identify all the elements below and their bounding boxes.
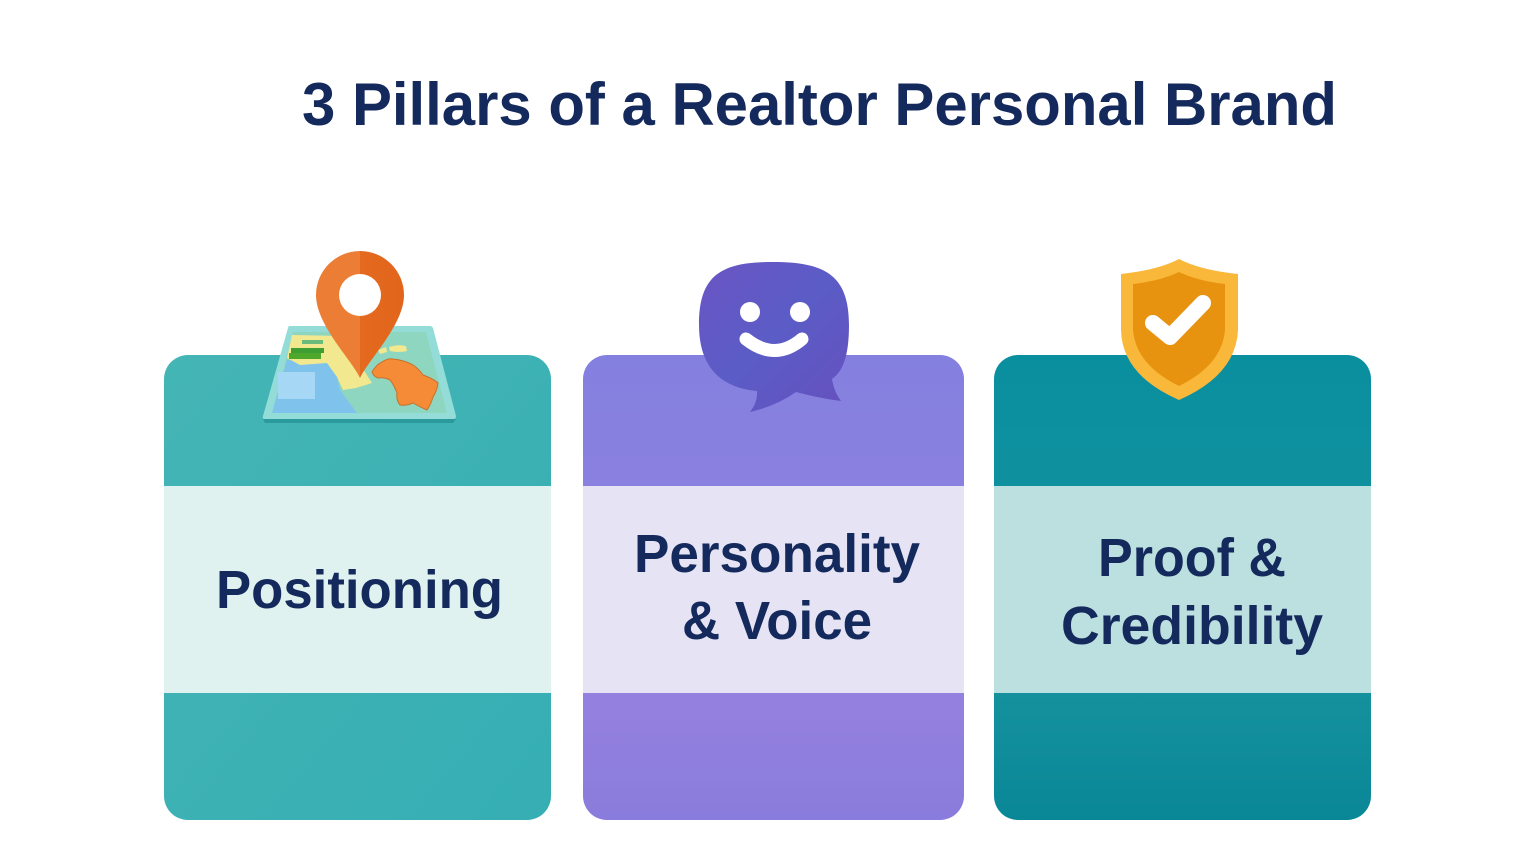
panel: proof and credibility [994, 355, 1371, 820]
label: personality and voice: Personality [634, 524, 920, 584]
label: proof and credibility [1061, 528, 1323, 656]
label band: positioning [164, 486, 551, 693]
location pin [316, 251, 404, 378]
icon: smiling speech bubble [699, 262, 849, 412]
panel: personality and voice [583, 355, 964, 820]
label: proof and credibility: Credibility [1061, 596, 1323, 656]
card background: positioning [164, 355, 551, 820]
label band: proof [994, 486, 1371, 693]
icon: map with location pin [263, 251, 456, 423]
card background: personality [583, 355, 964, 820]
panel: positioning [164, 355, 551, 820]
label: positioning: Positioning [216, 560, 503, 620]
label: proof and credibility: Proof & [1098, 528, 1286, 588]
map sheet [263, 326, 456, 423]
label: personality and voice [634, 524, 920, 651]
label: personality and voice: & Voice [682, 591, 872, 651]
label band: personality [583, 486, 964, 693]
icon: shield with check mark [1121, 259, 1238, 400]
card background: proof [994, 355, 1371, 820]
title: 3 Pillars of a Realtor Personal Brand [302, 71, 1337, 138]
